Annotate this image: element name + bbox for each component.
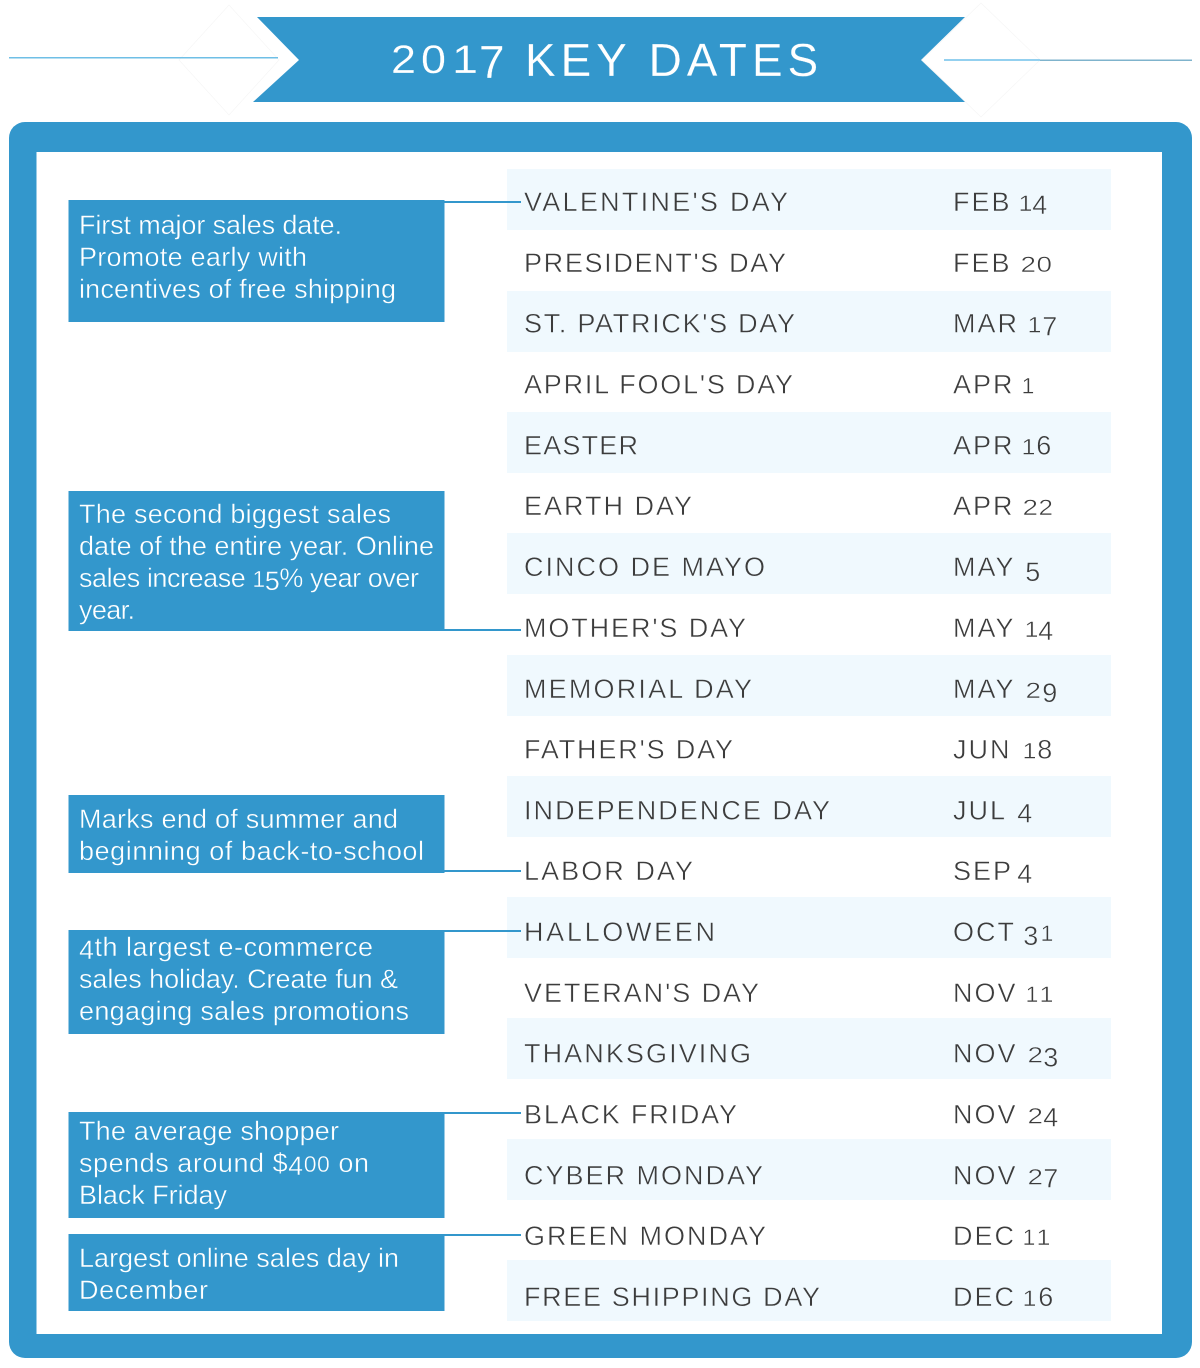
row: Memorial Day: 9 [1042,678,1057,708]
callout: Labor Day: Marks end of summer and [79,804,398,834]
callout: Black Friday: spends around $ [79,1148,288,1178]
row: President's Day: 0 [1036,252,1052,277]
title: KEY DATES [525,34,823,86]
row: Mother's Day [524,613,1053,646]
row: Thanksgiving: 2 [1028,1043,1043,1068]
row: Thanksgiving: NOV [953,1039,1018,1069]
row: April Fool's Day: APRIL FOOL'S DAY [524,370,793,400]
row: President's Day: FEB [953,248,1012,278]
callout: Labor Day [68,795,521,873]
callout: Black Friday: 4 [288,1151,303,1181]
row: Green Monday: 1 [1036,1225,1050,1250]
row: St. Patrick's Day: ST. PATRICK'S DAY [524,308,795,338]
row: April Fool's Day: APR [953,370,1015,400]
row: Halloween: OCT [953,917,1016,947]
callout: Black Friday: 00 [304,1151,330,1177]
row: Free Shipping Day: DEC [953,1282,1016,1312]
row: Earth Day: 2 [1022,495,1038,520]
row: Halloween: 1 [1040,921,1054,946]
row: Cyber Monday: NOV [953,1160,1018,1190]
row: Halloween: HALLOWEEN [524,917,715,947]
row: Father's Day: 8 [1037,734,1052,764]
callout: Halloween: th largest e-commerce [95,932,373,962]
row: Black Friday: 2 [1028,1104,1043,1128]
callout: Labor Day: beginning of back-to-school [79,836,424,866]
row: Labor Day: SEP [953,856,1013,886]
row: Valentine's Day: FEB [953,187,1012,217]
row: Mother's Day: MAY [953,613,1015,643]
header banner [9,3,1192,117]
row: Veteran's Day: NOV [953,978,1018,1008]
row: Black Friday [524,1100,1058,1132]
row: Veteran's Day: 1 [1040,982,1054,1007]
row: Black Friday: NOV [953,1100,1018,1130]
row: Cyber Monday [507,1139,1111,1200]
row: Black Friday: BLACK FRIDAY [524,1100,737,1130]
title: 7 [479,36,505,88]
row: Earth Day: 2 [1038,495,1053,520]
row: Thanksgiving: THANKSGIVING [524,1039,751,1069]
row: Black Friday: 4 [1043,1102,1058,1132]
callout: Mother's Day [68,491,521,631]
callout: Green Monday: December [79,1275,208,1305]
row: Independence Day: INDEPENDENCE DAY [524,795,830,825]
row: Earth Day [524,491,1053,521]
row: Easter: 6 [1036,430,1051,460]
row: Memorial Day [507,655,1111,716]
row: Cyber Monday: 7 [1043,1163,1058,1193]
row: Green Monday: GREEN MONDAY [524,1221,766,1251]
callout: Halloween: engaging sales promotions [79,996,409,1026]
row: Thanksgiving [507,1018,1111,1079]
row: Memorial Day: MEMORIAL DAY [524,674,752,704]
row: Valentine's Day: 4 [1032,190,1047,220]
row: Easter: EASTER [524,430,638,460]
callout: Valentine's Day: First major sales date. [79,210,342,240]
row: Mother's Day: MOTHER'S DAY [524,613,746,643]
callout: Green Monday: Largest online sales day in [79,1243,399,1273]
callout: Black Friday: Black Friday [79,1180,228,1210]
row: Earth Day: APR [953,491,1015,521]
callout: Halloween: 4 [79,935,94,965]
callout: Halloween [68,930,521,1034]
callout: Valentine's Day [68,200,521,322]
row: Mother's Day: 1 [1024,617,1038,642]
row: Easter: 1 [1022,434,1036,459]
row: Labor Day [524,856,1032,889]
row: Independence Day: 4 [1017,798,1032,828]
row: Free Shipping Day: 6 [1038,1282,1053,1312]
row: Valentine's Day: VALENTINE'S DAY [524,187,788,217]
table of key dates [507,169,1111,1321]
row: President's Day [524,248,1052,278]
row: Labor Day: LABOR DAY [524,856,693,886]
row: President's Day: 2 [1020,252,1036,277]
row: Easter [507,412,1111,473]
row: Memorial Day: 2 [1026,678,1041,703]
row: St. Patrick's Day: MAR [953,308,1019,338]
row: April Fool's Day: 1 [1022,374,1034,398]
row: Green Monday [524,1221,1050,1251]
row: Free Shipping Day: 1 [1022,1286,1036,1311]
row: St. Patrick's Day [507,291,1111,352]
row: Father's Day: 1 [1022,738,1036,764]
row: Cinco de Mayo: CINCO DE MAYO [524,552,765,582]
row: Cinco de Mayo: MAY [953,552,1015,582]
callout: Black Friday [68,1112,521,1218]
row: Cyber Monday: CYBER MONDAY [524,1160,763,1190]
callout: Black Friday: on [338,1148,369,1178]
row: Thanksgiving: 3 [1043,1043,1058,1073]
row: Memorial Day: MAY [953,674,1015,704]
row: Halloween [507,897,1111,958]
row: Easter: APR [953,430,1015,460]
row: President's Day: PRESIDENT'S DAY [524,248,786,278]
row: Mother's Day: 4 [1038,616,1053,646]
callout: Green Monday [68,1234,521,1311]
callout: Mother's Day: sales increase 1 [79,563,265,593]
row: Labor Day: 4 [1017,859,1032,889]
row: St. Patrick's Day: 1 [1028,312,1042,338]
row: Valentine's Day [507,169,1111,230]
row: Earth Day: EARTH DAY [524,491,692,521]
callout: Halloween: sales holiday. Create fun & [79,964,398,994]
callout: Mother's Day: year. [79,595,135,625]
row: Halloween: 3 [1023,921,1038,951]
row: Green Monday: 1 [1022,1225,1036,1250]
callout: Mother's Day: % year over [279,563,419,593]
row: Independence Day [507,776,1111,837]
row: Veteran's Day [524,978,1054,1008]
row: Cinco de Mayo [507,533,1111,594]
row: Green Monday: DEC [953,1221,1016,1251]
callout: Mother's Day: date of the entire year. Online [79,531,434,561]
row: Independence Day: JUL [953,795,1006,825]
row: Free Shipping Day [507,1260,1111,1321]
title: 1 [452,38,478,82]
row: Veteran's Day: 1 [1026,982,1038,1007]
row: Father's Day [524,734,1052,764]
row: St. Patrick's Day: 7 [1042,312,1057,342]
row: Veteran's Day: VETERAN'S DAY [524,978,759,1008]
row: April Fool's Day [524,370,1034,400]
callout: Valentine's Day: incentives of free shipping [79,274,396,304]
title: 2 [391,38,416,82]
row: Cyber Monday: 2 [1028,1164,1043,1189]
row: Valentine's Day: 1 [1018,191,1032,216]
callout: Valentine's Day: Promote early with [79,242,307,272]
row: Cinco de Mayo: 5 [1025,557,1040,587]
callout: Black Friday: The average shopper [79,1116,339,1146]
row: Father's Day: JUN [953,734,1012,764]
row: Free Shipping Day: FREE SHIPPING DAY [524,1282,820,1312]
callout: Mother's Day: The second biggest sales [79,499,391,529]
row: Father's Day: FATHER'S DAY [524,734,733,764]
title: 0 [421,38,446,82]
callout: Mother's Day: 5 [265,566,280,596]
